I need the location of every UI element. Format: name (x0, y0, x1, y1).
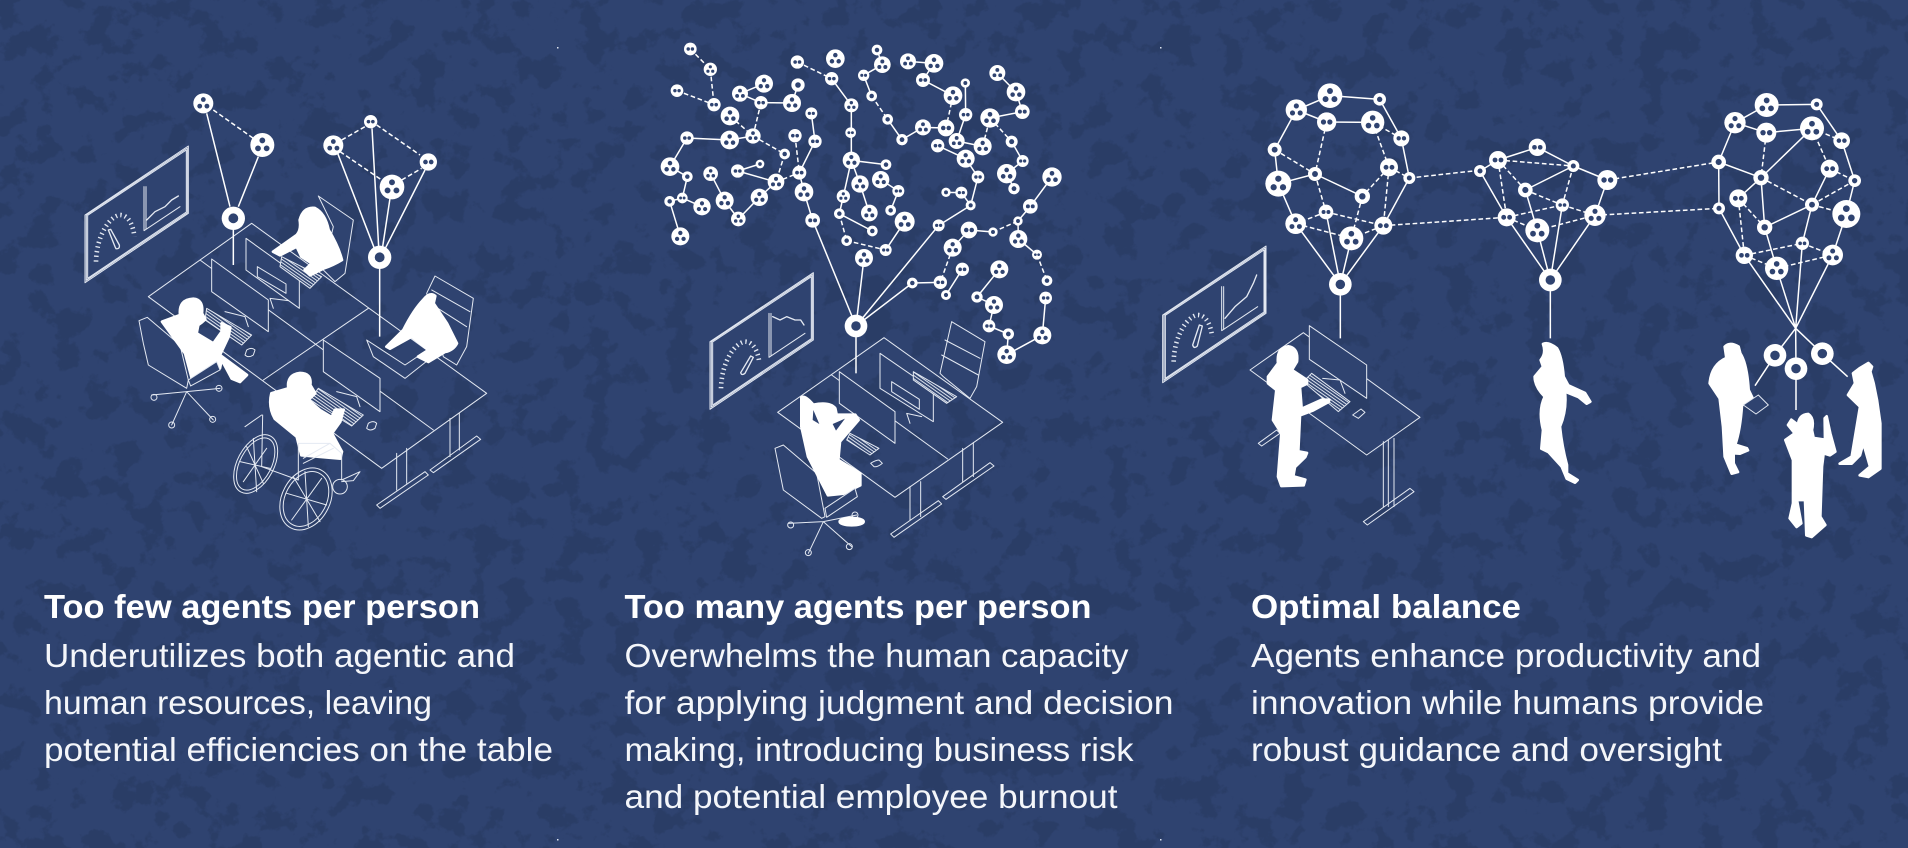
text: too many agents per person: and potential employee burnout (624, 778, 1118, 815)
wheelchair (225, 415, 360, 539)
panel: too few agents illustration (85, 93, 487, 539)
standing desk (1250, 326, 1420, 525)
text: too few agents per person: human resources, leaving (44, 684, 432, 721)
text: too few agents per person: Underutilizes both agentic and (44, 637, 515, 674)
network lines (1480, 104, 1855, 410)
network nodes (1265, 83, 1415, 296)
text: optimal balance: innovation while humans provide (1251, 684, 1764, 721)
agent network lines (207, 110, 425, 337)
text: optimal balance: Optimal balance (1251, 588, 1521, 625)
text: too many agents per person: Overwhelms the human capacity (624, 637, 1129, 674)
panel: too many agents workstation (710, 273, 1003, 556)
text: optimal balance: robust guidance and oversight (1251, 731, 1722, 768)
desks (148, 223, 487, 508)
monitors and keyboards (205, 238, 437, 426)
text: too many agents per person: Too many agents per person (624, 588, 1092, 625)
text: too many agents per person (624, 588, 1174, 815)
hub connector (854, 337, 858, 373)
text: optimal balance: Agents enhance productivity and (1251, 637, 1761, 674)
person silhouettes (1535, 343, 1880, 537)
panel: optimal balance, standing worker (1163, 83, 1507, 525)
person silhouettes (162, 208, 457, 459)
text: too many agents per person: making, introducing business risk (624, 731, 1134, 768)
wall dashboard monitor (710, 273, 813, 409)
chair seat band (188, 362, 220, 386)
text: too many agents per person: for applying judgment and decision (624, 684, 1174, 721)
chair seat band (825, 488, 857, 517)
text: too few agents per person: Too few agents per person (44, 588, 480, 625)
network nodes (1474, 93, 1861, 380)
network lines (670, 49, 1052, 355)
agent nodes (193, 93, 437, 269)
panel: optimal balance, middle and right groups (1474, 93, 1880, 537)
chairs (775, 322, 985, 556)
wall dashboard monitor (1163, 246, 1266, 383)
tablet (1743, 395, 1768, 414)
person silhouette (1268, 346, 1329, 486)
wall dashboard monitor (85, 146, 188, 283)
hub node: too many agents (845, 315, 867, 337)
desk (778, 338, 1003, 537)
monitors and keyboards (839, 353, 957, 455)
chairs (139, 196, 473, 428)
network nodes (661, 43, 1062, 364)
person silhouette (801, 397, 864, 525)
person arm gaps (813, 410, 845, 431)
text: too few agents per person (44, 588, 553, 768)
text: optimal balance (1251, 588, 1764, 768)
panel: too many agents network (661, 43, 1062, 364)
network lines (1275, 96, 1507, 338)
text: too few agents per person: potential efficiencies on the table (44, 731, 553, 768)
